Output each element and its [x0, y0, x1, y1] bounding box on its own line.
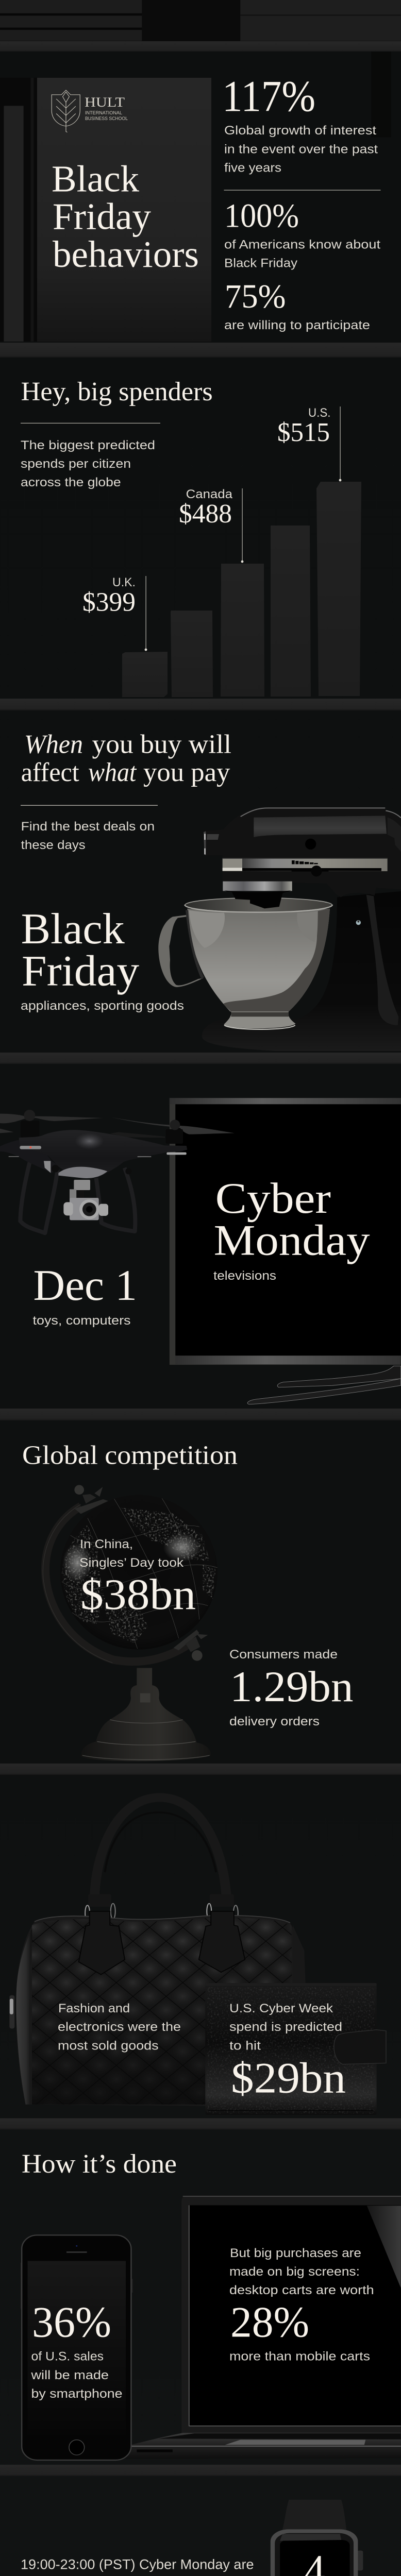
title: behaviors	[53, 233, 199, 275]
callout: Canada $488: Canada	[186, 487, 233, 501]
logo: Hult International Business School: INTERNATIONAL	[85, 110, 122, 116]
callout: U.K. $399	[82, 575, 147, 651]
image: globe stand	[81, 1668, 211, 1761]
text: intro	[21, 438, 155, 489]
text: find the best deals: these days	[21, 838, 86, 852]
logo: Hult International Business School: HULT	[85, 95, 125, 110]
callout: U.K. $399: $399	[82, 588, 136, 617]
stat: 117%: in the event over the past	[224, 142, 378, 157]
shelf: top	[0, 41, 401, 52]
text: fashion and electronics: electronics were the	[58, 2020, 181, 2034]
logo: Hult International Business School	[52, 90, 128, 132]
text: Cyber Monday	[213, 1174, 370, 1283]
stat: 100%: 100%	[224, 197, 299, 235]
stat: 100%: Black Friday	[224, 257, 297, 270]
text: big screens 28%: 28%	[230, 2298, 309, 2347]
callout: U.S. $515: $515	[277, 418, 330, 447]
text: intro: The biggest predicted	[21, 438, 155, 452]
text: big screens 28%: desktop carts are worth	[229, 2283, 374, 2297]
heading: you pay	[143, 758, 230, 787]
shelf	[0, 1053, 401, 1064]
text: Dec 1: Dec 1	[33, 1261, 137, 1310]
text: Cyber Monday: televisions	[213, 1269, 276, 1283]
text: golden hours: 19:00-23:00 (PST) Cyber Monday are	[21, 2557, 254, 2572]
stat: 100%: of Americans know about	[224, 238, 380, 251]
text: Cyber Monday: Cyber	[215, 1174, 331, 1223]
stat: 75%: 75%	[225, 278, 286, 315]
image: book cover	[37, 78, 211, 342]
callout: U.S. $515	[277, 406, 341, 481]
heading: How it’s done	[22, 2149, 177, 2179]
text: delivery orders: Consumers made	[229, 1648, 338, 1662]
panel: fashion and wallet	[0, 1798, 401, 2130]
panel: Dec 1 and Cyber Monday	[0, 1098, 401, 1420]
heading: Hey, big spenders	[21, 377, 213, 406]
stat: 117%	[222, 72, 378, 175]
text: U.S. Cyber Week: spend is predicted	[229, 2020, 342, 2034]
shelf	[0, 2119, 401, 2130]
text: Singles' Day: $38bn	[80, 1570, 196, 1619]
text: fashion and electronics: most sold goods	[58, 2039, 159, 2053]
panel: When you buy	[0, 730, 401, 1064]
image: smartwatch	[271, 2500, 363, 2576]
callout: Canada $488: $488	[179, 499, 232, 529]
stat: 117%: Global growth of interest	[224, 124, 376, 138]
stat: 75%: are willing to participate	[224, 318, 370, 332]
shelf: under book	[0, 343, 401, 358]
heading: what	[88, 758, 137, 787]
text: big screens 28%	[229, 2246, 374, 2364]
text: fashion and electronics: Fashion and	[58, 2002, 130, 2015]
text: U.S. Cyber Week	[229, 2002, 346, 2103]
text: big screens 28%: more than mobile carts	[229, 2350, 370, 2364]
shelf	[0, 2465, 401, 2476]
image: stand mixer	[158, 807, 401, 1051]
chart: wooden block bars	[122, 482, 361, 697]
image: stacked books on top shelf	[0, 0, 401, 342]
text: Black Friday	[21, 905, 184, 1013]
text: find the best deals: Find the best deals on	[21, 820, 155, 834]
text: 36% of sales by smartphone: will be made	[30, 2368, 109, 2382]
panel: intro shelf with books	[0, 0, 401, 358]
callout: U.K. $399: U.K.	[112, 575, 136, 589]
callout: U.S. $515: U.S.	[308, 406, 331, 420]
shelf	[0, 699, 401, 710]
text: U.S. Cyber Week: $29bn	[231, 2054, 346, 2103]
heading: Global competition	[22, 1440, 238, 1470]
text: delivery orders: 1.29bn	[230, 1663, 354, 1711]
text: delivery orders	[229, 1648, 354, 1728]
text: intro: spends per citizen	[21, 457, 131, 471]
image: drone	[0, 1110, 235, 1233]
text: Cyber Monday: Monday	[214, 1216, 370, 1265]
text: 36% of sales by smartphone: by smartphone	[31, 2387, 123, 2401]
text: Dec 1: toys, computers	[33, 1314, 131, 1328]
shelf	[0, 1409, 401, 1420]
text: big screens 28%: But big purchases are	[230, 2246, 361, 2260]
text: Black Friday: appliances, sporting goods	[21, 999, 184, 1013]
panel: Hey, big spenders	[0, 377, 401, 710]
image: television	[170, 1098, 401, 1404]
text: U.S. Cyber Week: U.S. Cyber Week	[229, 2002, 333, 2015]
text: 36% of sales by smartphone: 36%	[32, 2298, 111, 2347]
stat: 117%: 117%	[222, 72, 315, 121]
text: intro: across the globe	[21, 476, 121, 489]
image: laptop	[114, 2196, 401, 2459]
title: Friday	[53, 196, 151, 238]
shelf	[0, 1764, 401, 1775]
panel: How it's done	[0, 2149, 401, 2476]
stat: 100%	[224, 197, 380, 270]
text: U.S. Cyber Week: to hit	[229, 2039, 261, 2053]
title	[52, 158, 199, 275]
callout: Canada $488	[179, 487, 243, 563]
stat: 75%	[224, 278, 370, 332]
title: Black	[52, 158, 139, 200]
text: 36% of sales by smartphone: of U.S. sales	[31, 2350, 104, 2364]
text: fashion and electronics	[58, 2002, 181, 2053]
panel: golden hours	[0, 2500, 401, 2576]
text: Black Friday: Black	[21, 905, 125, 953]
stat: 117%: five years	[224, 161, 281, 175]
text: Singles' Day	[79, 1537, 196, 1619]
text: Singles' Day: In China,	[80, 1537, 133, 1551]
text: find the best deals	[21, 820, 155, 852]
text: 36% of sales by smartphone	[30, 2298, 122, 2401]
image: quilted handbag	[9, 1798, 306, 2107]
heading: affect	[21, 758, 79, 787]
image: smartphone	[21, 2235, 133, 2460]
heading: When	[24, 730, 83, 759]
image: globe	[43, 1485, 218, 1663]
text: big screens 28%: made on big screens:	[229, 2265, 360, 2279]
heading: you buy will	[92, 730, 231, 759]
heading	[21, 730, 231, 787]
panel: Global competition	[0, 1440, 401, 1775]
image: leather wallet	[205, 1983, 386, 2115]
text: delivery orders: delivery orders	[229, 1715, 320, 1728]
text: Black Friday: Friday	[22, 947, 140, 995]
text: Singles' Day: Singles’ Day took	[79, 1556, 184, 1570]
logo: Hult International Business School: BUSINESS SCHOOL	[85, 116, 128, 122]
